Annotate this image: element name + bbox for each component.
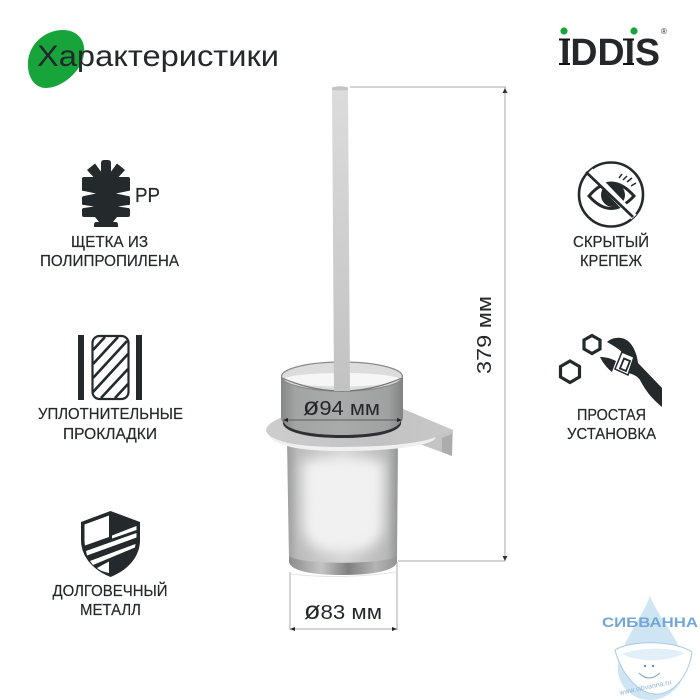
heading: Характеристики (37, 40, 279, 73)
caption: metal: МЕТАЛЛ (80, 602, 141, 619)
icon: polypropylene brush (82, 160, 130, 227)
upper glass cup (281, 376, 403, 436)
caption: installation: УСТАНОВКА (567, 426, 657, 443)
caption: brush: ЩЕТКА ИЗ (71, 234, 148, 251)
dimension: glass diameter 83 mm: ø83 мм (304, 597, 382, 625)
IDDIS logo: IDDIS (560, 32, 660, 74)
IDDIS logo: ® (661, 27, 667, 36)
icon: seals (78, 335, 142, 400)
icon: shield (81, 511, 140, 577)
caption: seals: УПЛОТНИТЕЛЬНЫЕ (38, 406, 183, 423)
watermark: Sibvanna: СИБВАННА (602, 614, 698, 630)
dimension: glass diameter 83 mm (290, 562, 397, 631)
caption: seals: ПРОКЛАДКИ (63, 426, 157, 443)
dimension: cup diameter 94 mm (283, 393, 402, 422)
caption: installation: ПРОСТАЯ (577, 407, 646, 424)
caption: hidden fastening (573, 233, 649, 270)
watermark: Sibvanna (602, 595, 698, 700)
icon: hidden fastening (579, 162, 643, 226)
icon: wrench and nuts (560, 336, 662, 407)
dimension: height 379 mm (350, 87, 508, 561)
caption: hidden fastening: СКРЫТЫЙ (573, 233, 649, 251)
watermark: Sibvanna: www.sibvanna.ru (618, 679, 672, 697)
plate (266, 409, 453, 447)
wall bracket (395, 409, 453, 456)
caption: brush: ПОЛИПРОПИЛЕНА (40, 253, 180, 270)
caption: metal (52, 582, 168, 619)
brush handle (332, 86, 350, 391)
lower frosted glass (287, 440, 398, 577)
caption: hidden fastening: КРЕПЕЖ (580, 253, 643, 270)
caption: metal: ДОЛГОВЕЧНЫЙ (52, 582, 168, 600)
dimension: cup diameter 94 mm: ø94 мм (303, 393, 380, 421)
green blob (28, 30, 84, 88)
product: toilet brush holder (266, 86, 453, 577)
title with green blob (28, 30, 279, 88)
PP label: PP (135, 185, 160, 207)
caption: installation (567, 407, 657, 443)
caption: seals (38, 406, 183, 443)
caption: brush (40, 234, 180, 270)
dimension: height 379 mm: 379 мм (473, 296, 496, 374)
